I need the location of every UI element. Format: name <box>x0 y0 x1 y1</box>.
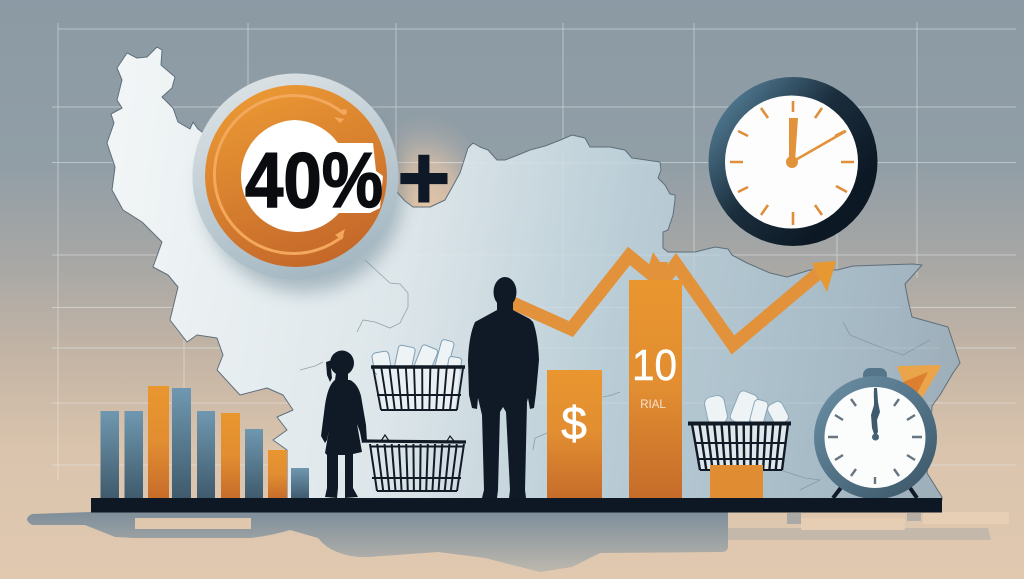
rial bar: 10 <box>632 341 677 390</box>
peach glow behind the plus sign <box>353 112 497 312</box>
plus sign: + <box>397 127 451 229</box>
grid lines over the map <box>200 150 940 403</box>
full basket above <box>371 339 465 410</box>
40 percent badge <box>192 74 403 292</box>
map region lines <box>300 260 930 490</box>
ground bar <box>91 498 942 512</box>
man silhouette <box>468 277 539 498</box>
bar chart <box>100 386 309 499</box>
dollar bar: $ <box>561 397 587 449</box>
grid lines behind the map <box>52 22 1016 480</box>
40 percent badge: 40% <box>245 136 383 224</box>
child silhouette <box>321 350 367 498</box>
small orange block <box>710 465 763 498</box>
rial bar: RIAL <box>640 399 666 411</box>
map of the country <box>107 47 960 500</box>
empty basket <box>363 435 466 491</box>
small orange flag <box>897 365 940 398</box>
ground shadow <box>27 512 1009 572</box>
dollar bar <box>547 370 602 498</box>
rising trend arrow <box>513 252 836 345</box>
alarm clock icon <box>814 368 937 499</box>
full basket on the right <box>688 389 791 498</box>
wall clock icon <box>708 77 878 246</box>
rial bar <box>629 280 682 498</box>
